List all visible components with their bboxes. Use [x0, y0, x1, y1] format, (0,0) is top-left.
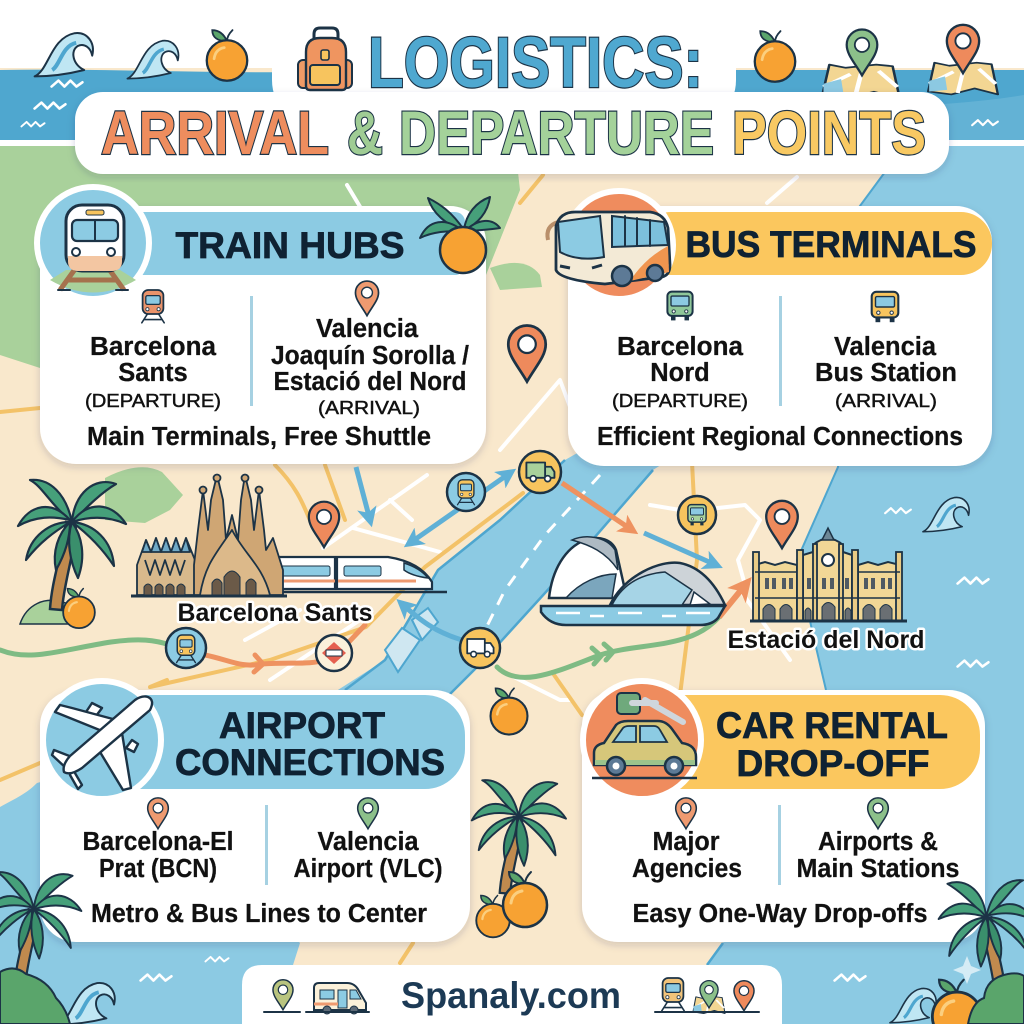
bottom waves and shrubs right: [835, 956, 981, 1023]
right text: Airport (VLC): [294, 855, 442, 883]
left text: [632, 828, 742, 883]
icon: oranges centre: [476, 872, 547, 937]
badge: truck yellow: [519, 451, 561, 493]
heading: DROP-OFF: [736, 743, 930, 784]
footer website: Spanaly.com: [401, 975, 621, 1016]
footer icon: map pin left: [264, 980, 300, 1012]
arrow: blue double: [410, 473, 510, 543]
title line 1: LOGISTICS:: [368, 24, 703, 103]
route: green line right: [497, 617, 719, 677]
arrival text: Bus Station: [815, 359, 957, 387]
arrow: blue diagonal: [644, 533, 716, 565]
yellow roads: [0, 175, 697, 963]
icon: pin: [358, 798, 378, 829]
title line 2: DEPARTURE: [399, 99, 714, 167]
footer icon: orange pin: [655, 981, 759, 1012]
icon: car and keys badge: [583, 681, 701, 799]
map roads: [245, 177, 797, 700]
arrival text: [815, 333, 957, 411]
icon: orange centre: [491, 688, 527, 735]
landmark: Sagrada Familia and train: [131, 474, 447, 596]
arrow: orange to station: [719, 584, 746, 617]
river: [320, 440, 700, 800]
arrival text: Estació del Nord: [274, 368, 466, 396]
icon: bus badge: [547, 191, 673, 299]
icon: bus yellow: [872, 292, 898, 322]
panel: train hubs: [37, 187, 500, 464]
heading: [716, 705, 948, 784]
pin: Valencia: [766, 501, 798, 548]
left text: Major: [652, 828, 720, 856]
arrival text: Valencia: [834, 333, 937, 361]
arrow: orange diagonal: [562, 483, 632, 530]
right text: Main Stations: [796, 855, 960, 883]
left text: Agencies: [632, 855, 742, 883]
route: orange line left: [205, 625, 365, 672]
left text: [82, 828, 234, 883]
label: Estació del Nord: Estació del Nord: [728, 626, 924, 654]
header bar: [640, 212, 992, 275]
arrival text: (ARRIVAL): [318, 397, 420, 418]
departure text: Barcelona: [90, 333, 217, 361]
bottom waves and shrubs left: [59, 957, 229, 1024]
icon: map with orange pin: [928, 25, 998, 94]
heading: CAR RENTAL: [716, 705, 948, 746]
panel: airport connections: [40, 681, 470, 942]
icon: pin: [868, 798, 888, 829]
icon: plane badge: [43, 681, 161, 799]
icon: pin: [676, 798, 696, 829]
icon: orange left: [207, 30, 247, 81]
landmark: Estació del Nord: [750, 528, 907, 621]
palm: left: [18, 480, 126, 624]
departure text: (DEPARTURE): [612, 390, 748, 411]
shrub: bottom right: [968, 973, 1024, 1024]
icon: map with green pin: [822, 30, 900, 98]
landmark: City of Arts and Sciences: [541, 537, 725, 625]
header bar: [100, 695, 465, 789]
label: Barcelona Sants: Barcelona Sants: [178, 599, 372, 627]
right text: Valencia: [318, 828, 419, 856]
departure text: [612, 333, 748, 411]
arrival text: [271, 315, 469, 418]
arrow: blue down: [356, 467, 370, 520]
palm: centre: [472, 780, 566, 894]
badge: metro diamond: [316, 635, 352, 671]
arrival text: Valencia: [316, 315, 419, 343]
heading: CONNECTIONS: [175, 742, 445, 783]
departure text: [85, 333, 221, 411]
palm: bottom right: [939, 880, 1024, 995]
icon: palm and orange: [420, 197, 500, 273]
sea waves right: [885, 497, 988, 667]
arrival text: (ARRIVAL): [835, 390, 937, 411]
panel: car rental: [582, 681, 985, 942]
pin: Barcelona: [309, 502, 339, 547]
departure text: Barcelona: [617, 333, 744, 361]
right text: [796, 828, 960, 883]
title line 2: [101, 99, 926, 167]
arrow: blue to Sants: [402, 604, 462, 640]
right text: [294, 828, 442, 883]
icon: orange right: [755, 31, 795, 82]
left text: Prat (BCN): [99, 855, 217, 883]
note: Metro & Bus Lines to Center: [91, 900, 427, 928]
departure text: Sants: [118, 359, 188, 387]
right text: Airports &: [818, 828, 938, 856]
footer icon: map pin: [693, 981, 725, 1014]
footer icon: camper: [306, 983, 369, 1014]
icon: orange near palm: [63, 589, 95, 628]
panel: bus terminals: [547, 191, 992, 466]
title line 2: POINTS: [732, 99, 926, 167]
top waves: [21, 33, 998, 126]
icon: pin: [355, 281, 379, 316]
note: Easy One-Way Drop-offs: [632, 900, 928, 928]
badge: bus yellow: [678, 496, 716, 534]
palm: bottom left: [0, 872, 81, 987]
footer icon: train: [662, 978, 684, 1011]
note: Efficient Regional Connections: [597, 423, 963, 451]
departure text: (DEPARTURE): [85, 390, 221, 411]
title banner: [75, 10, 949, 174]
badge: bus yellow lower: [460, 628, 500, 668]
heading: BUS TERMINALS: [686, 224, 976, 265]
heading: AIRPORT: [219, 705, 385, 746]
departure text: Nord: [650, 359, 710, 387]
title line 2: &: [347, 99, 383, 167]
left text: Barcelona-El: [82, 828, 234, 856]
icon: bus green: [667, 292, 693, 320]
title line 2: ARRIVAL: [101, 99, 329, 167]
header bar: [120, 212, 465, 275]
heading: [175, 705, 445, 783]
badge: train blue top: [447, 473, 485, 511]
heading: TRAIN HUBS: [176, 225, 404, 266]
shrub: bottom left: [0, 968, 70, 1024]
badge: train blue left: [166, 628, 206, 668]
header bar: [640, 695, 980, 789]
church: [137, 474, 283, 595]
icon: pin: [148, 798, 168, 829]
train: [278, 557, 447, 592]
footer bar: [242, 965, 782, 1024]
route: green line left: [0, 640, 170, 655]
icon: orange bottom right: [932, 980, 982, 1024]
map pin: centre: [508, 326, 546, 382]
icon: train small: [142, 290, 164, 323]
arrival text: Joaquín Sorolla /: [271, 342, 469, 370]
icon: backpack: [298, 28, 352, 90]
note: Main Terminals, Free Shuttle: [87, 423, 431, 451]
icon: train badge: [37, 187, 149, 299]
